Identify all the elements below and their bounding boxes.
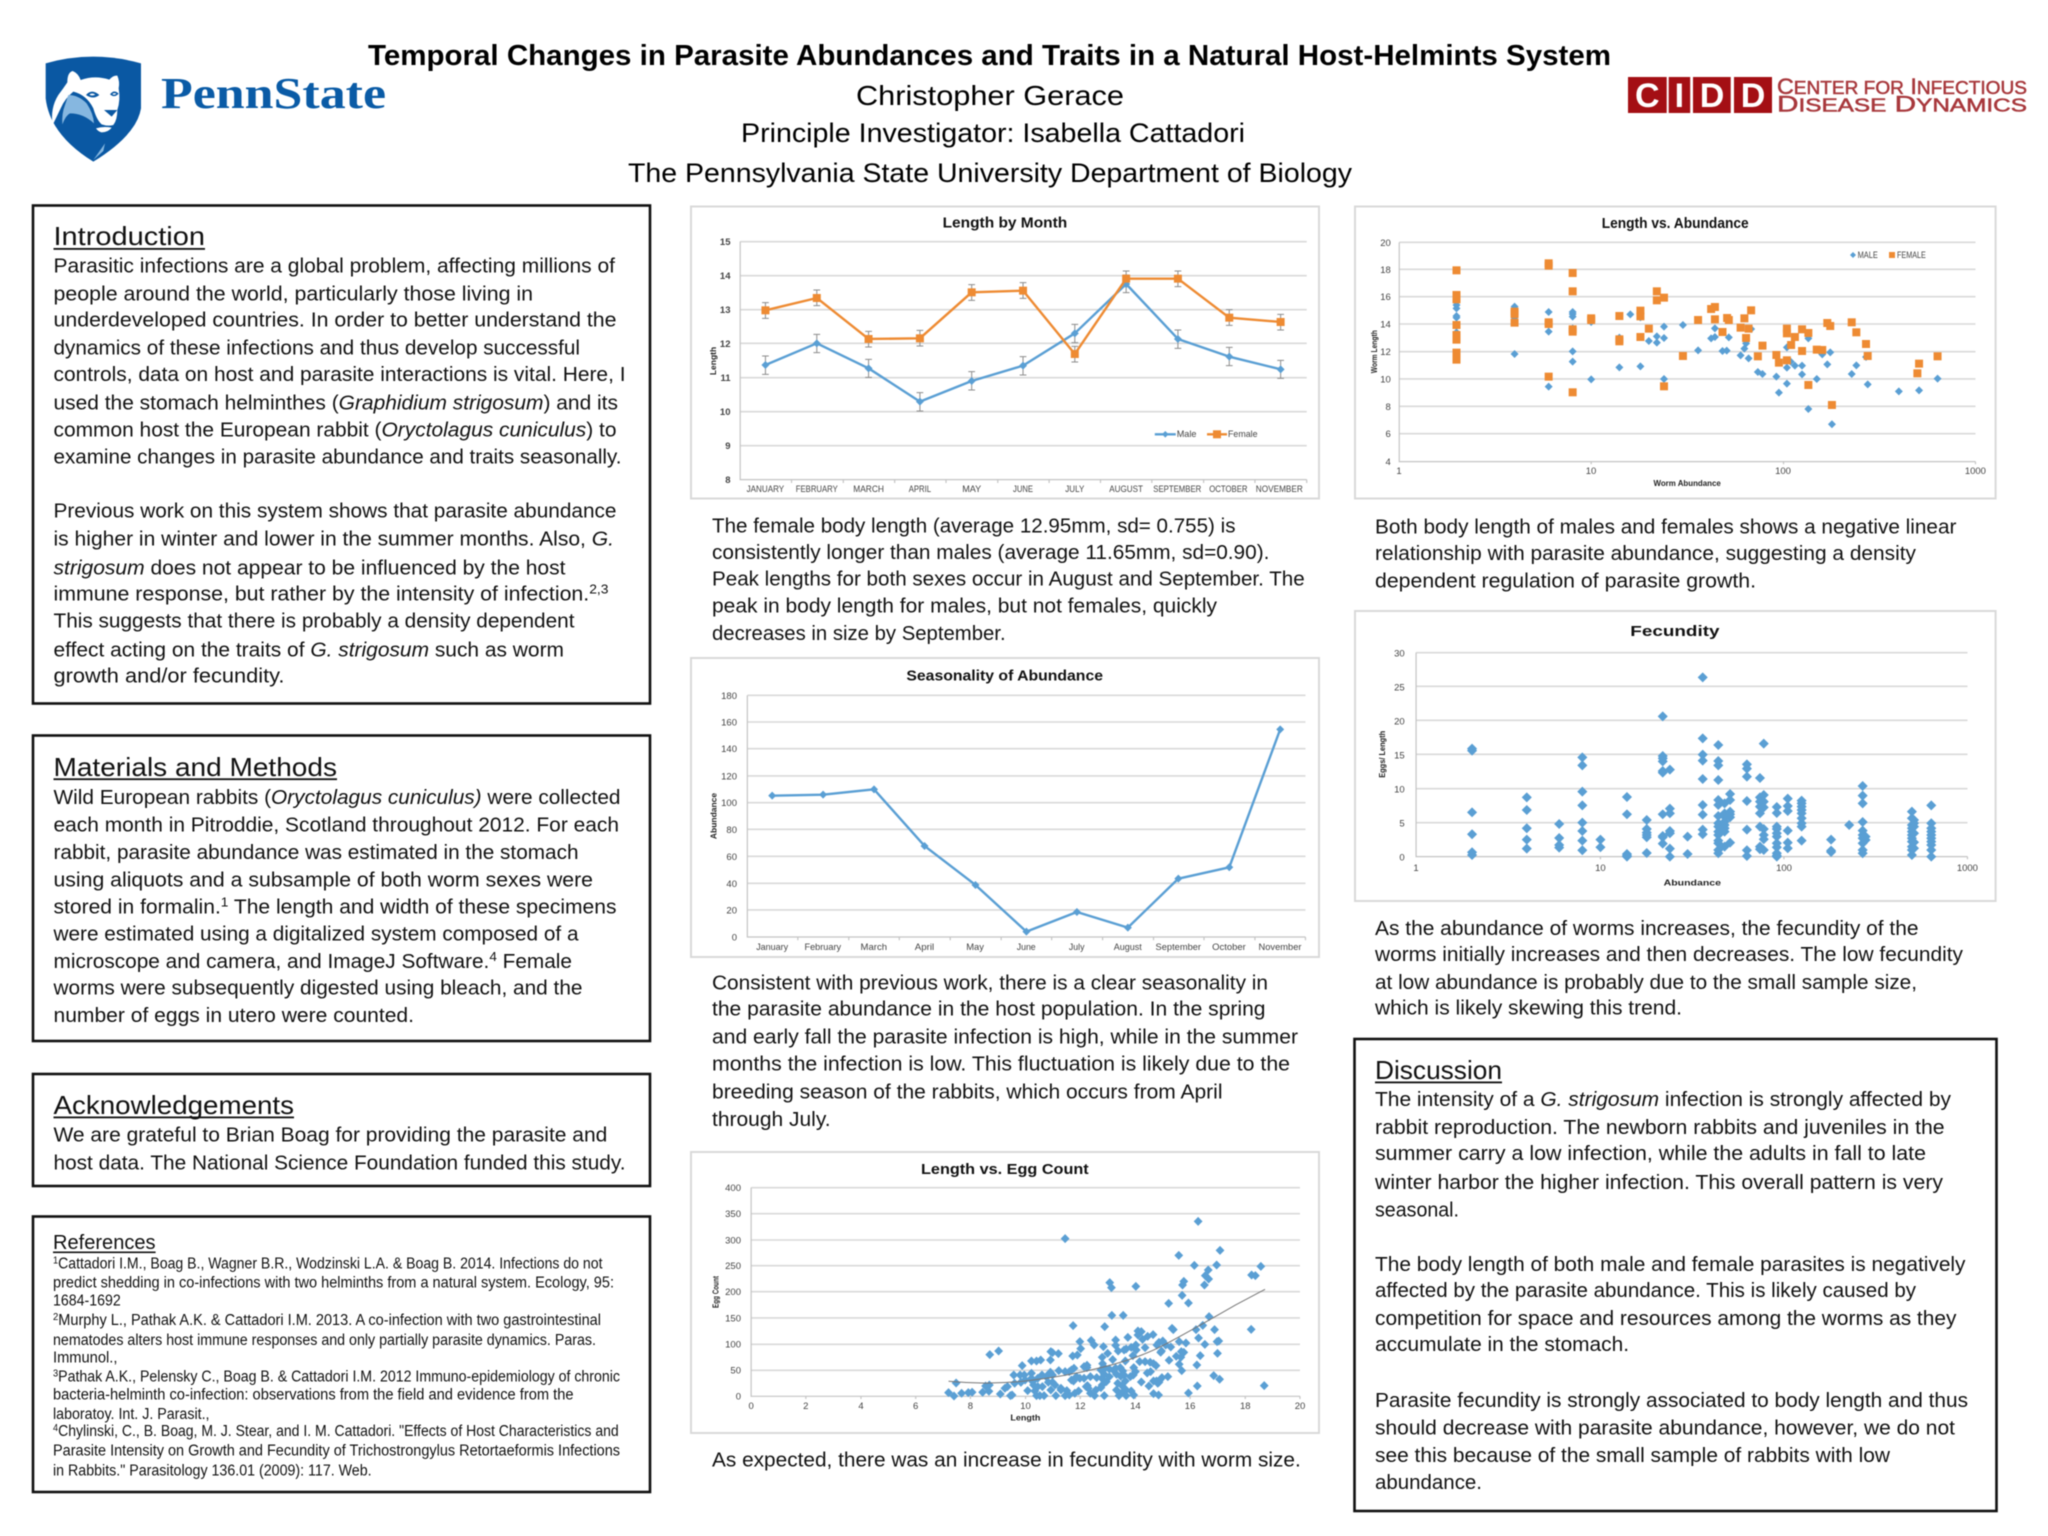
chart title: Length vs. Egg Count: [921, 1162, 1089, 1178]
text: introduction body: 2,3: [589, 581, 608, 596]
x axis labels: AUGUST: [1109, 484, 1143, 495]
heading: references: References: [53, 1231, 156, 1254]
text: methods body: microscope and camera, and ImageJ Software.: [54, 951, 473, 973]
x axis labels: 0: [748, 1401, 754, 1412]
y axis labels: 300: [725, 1236, 741, 1246]
caption: length vs abundance: relationship with parasite abundance, suggesting a density: [1375, 543, 1916, 565]
caption: length by month: consistently longer than males (average 11.65mm, sd=0.90).: [712, 542, 1269, 564]
heading: introduction: Introduction: [54, 221, 205, 251]
text: introduction body: examine changes in parasite abundance and traits seasonally.: [54, 446, 622, 468]
x axis labels: February: [804, 942, 841, 953]
CIDD tiles: I: [1675, 77, 1684, 115]
panel: materials and methods: [33, 736, 650, 1041]
y axis labels: 160: [721, 718, 737, 728]
text: discussion body: abundance.: [1375, 1472, 1482, 1494]
y axis labels: 8: [1386, 402, 1391, 413]
x axis labels: 12: [1075, 1401, 1086, 1412]
x axis labels: October: [1212, 942, 1246, 953]
text: reference list: laboratoy. Int. J. Parasit.,: [53, 1406, 210, 1423]
CIDD tiles: C: [1635, 77, 1660, 115]
y axis title: Egg Count: [710, 1276, 720, 1308]
x axis labels: August: [1114, 942, 1142, 953]
caption: length by month: decreases in size by September.: [712, 623, 1006, 645]
y axis title: Length: [708, 347, 718, 375]
y axis labels: 14: [1380, 320, 1391, 330]
CIDD tiles: D: [1700, 77, 1724, 115]
text: discussion body: summer carry a low infection, while the adults in fall to late: [1375, 1143, 1926, 1165]
y axis labels: 10: [1380, 374, 1391, 386]
legend: Male: [1177, 429, 1196, 440]
panel: references: [33, 1216, 650, 1492]
chart: seasonality of abundance: [691, 658, 1319, 957]
x axis labels: July: [1069, 942, 1085, 953]
investigator: Principle Investigator: Isabella Cattadori: [741, 118, 1245, 148]
legend: [1155, 429, 1258, 440]
text: reference list: Chylinski, C., B. Boag, M. J. Stear, and I. M. Cattadori. "Effects of Host Characteristics and: [58, 1423, 619, 1440]
caption: seasonality: [712, 972, 1298, 1131]
CIDD tiles: D: [1741, 77, 1765, 115]
text: methods body: Wild European rabbits ( Oryctolagus cuniculus) were collected: [54, 787, 620, 809]
x axis labels: 18: [1240, 1401, 1251, 1412]
x axis labels: MAY: [962, 484, 982, 495]
axes y labels: 12: [720, 339, 730, 350]
y axis labels: 150: [725, 1314, 741, 1324]
text: reference list: in Rabbits." Parasitology 136.01 (2009): 117. Web.: [53, 1463, 372, 1480]
x axis labels: APRIL: [909, 484, 931, 495]
axes y labels: 11: [720, 373, 731, 384]
text: reference list: predict shedding in co-infections with two helminths from a natural system. Ecology, 95:: [53, 1275, 614, 1292]
text: introduction body: controls, data on host and parasite interactions is vital. Here, I: [54, 364, 626, 386]
y axis labels: 18: [1380, 265, 1391, 276]
y axis labels: [1394, 649, 1405, 864]
y axis labels: 10: [1394, 785, 1405, 796]
text: discussion body: accumulate in the stomach.: [1375, 1334, 1629, 1356]
logo: CIDD: [1628, 74, 2027, 116]
plot: fecundity scatter: [1416, 653, 1967, 859]
x axis labels: [748, 1401, 1305, 1412]
y axis labels: 0: [1399, 853, 1405, 864]
text: acknowledgements body: host data. The National Science Foundation funded this study.: [54, 1152, 626, 1174]
caption: seasonality: the parasite abundance in the host population. In the spring: [712, 998, 1266, 1020]
x axis labels: 10: [1020, 1401, 1031, 1412]
CIDD name: CENTER FOR INFECTIOUS: [1777, 74, 2027, 99]
chart title: Fecundity: [1630, 624, 1720, 640]
x axis labels: [756, 942, 1302, 953]
plot: male and female lines with error bars: [740, 242, 1307, 483]
text: discussion body: seasonal.: [1375, 1199, 1459, 1221]
text: discussion body: winter harbor the higher infection. This overall pattern is very: [1374, 1172, 1943, 1194]
text: reference list: 2: [53, 1312, 59, 1323]
axes y labels: 13: [720, 305, 730, 316]
x axis labels: 100: [1776, 863, 1792, 874]
x axis labels: 16: [1185, 1401, 1195, 1412]
CIDD tiles: [1628, 77, 1772, 115]
panel: introduction: [33, 206, 650, 704]
heading: discussion: Discussion: [1375, 1055, 1502, 1085]
text: discussion body: rabbit reproduction. The newborn rabbits and juveniles in the: [1375, 1117, 1945, 1139]
y axis title: Abundance: [708, 793, 718, 839]
y axis labels: 80: [726, 825, 737, 836]
text: reference list: 1684-1692: [53, 1293, 121, 1310]
chart title: Length by Month: [943, 216, 1067, 232]
text: reference list: bacteria-helminth co-infection: observations from the field and evidence from the: [53, 1386, 574, 1403]
x axis title: Length: [1010, 1413, 1040, 1423]
legend: Female: [1228, 429, 1258, 440]
x axis labels: FEBRUARY: [796, 484, 838, 495]
text: introduction body: strigosum does not appear to be influenced by the host: [54, 557, 566, 579]
x axis labels: 10: [1586, 466, 1596, 477]
caption: fecundity: As the abundance of worms increases, the fecundity of the: [1375, 918, 1918, 940]
text: reference list: Immunol.,: [53, 1350, 117, 1367]
x axis labels: 1000: [1965, 466, 1986, 477]
x axis labels: 10: [1595, 863, 1606, 874]
y axis labels: 15: [1394, 750, 1405, 761]
x axis labels: 1: [1413, 863, 1419, 874]
text: introduction body: growth and/or fecundity.: [54, 665, 284, 687]
legend: MALE: [1858, 250, 1878, 261]
text: reference list: 4: [53, 1423, 58, 1434]
caption: length by month: [712, 516, 1305, 645]
y axis labels: 20: [1380, 238, 1391, 249]
y axis labels: 12: [1380, 347, 1391, 358]
text: introduction body: [54, 255, 626, 687]
caption: seasonality: and early fall the parasite infection is high, while in the summer: [712, 1026, 1298, 1048]
caption: length by month: The female body length (average 12.95mm, sd= 0.755) is: [712, 516, 1236, 538]
x axis labels: [747, 484, 1303, 495]
caption: fecundity: [1374, 918, 1963, 1020]
text: methods body: number of eggs in utero were counted.: [54, 1005, 414, 1027]
text: reference list: 3: [53, 1369, 59, 1380]
text: methods body: using aliquots and a subsample of both worm sexes were: [54, 869, 593, 891]
text: introduction body: immune response, but rather by the intensity of infection.: [54, 583, 556, 605]
y axis labels: 60: [726, 852, 737, 863]
text: methods body: Female: [497, 951, 572, 973]
x axis labels: 100: [1775, 466, 1791, 477]
CIDD name: D ISEASE D YNAMICS: [1777, 92, 2027, 116]
text: introduction body: underdeveloped countries. In order to better understand the: [54, 309, 616, 331]
caption: seasonality: months the infection is low. This fluctuation is likely due to the: [712, 1053, 1290, 1075]
caption: fecundity: at low abundance is probably due to the small sample size,: [1375, 972, 1917, 994]
caption: seasonality: Consistent with previous work, there is a clear seasonality in: [712, 972, 1268, 994]
x axis labels: 1: [1396, 466, 1402, 477]
x axis labels: March: [861, 942, 887, 953]
panel: discussion: [1354, 1039, 1996, 1511]
y axis labels: 20: [1394, 716, 1405, 727]
text: acknowledgements body: We are grateful to Brian Boag for providing the parasite and: [54, 1124, 607, 1146]
y axis labels: 180: [721, 691, 737, 702]
x axis labels: JUNE: [1013, 484, 1033, 495]
chart: fecundity: [1355, 611, 1996, 901]
y axis labels: 6: [1386, 429, 1391, 440]
text: methods body: 4: [489, 949, 497, 964]
x axis labels: SEPTEMBER: [1153, 484, 1201, 495]
y axis labels: [721, 691, 737, 944]
y axis labels: 400: [725, 1183, 741, 1194]
text: introduction body: Previous work on this system shows that parasite abundance: [54, 500, 616, 522]
caption: length by month: Peak lengths for both sexes occur in August and September. The: [712, 569, 1305, 591]
text: methods body: rabbit, parasite abundance was estimated in the stomach: [54, 842, 578, 864]
wordmark: PennState: [161, 69, 386, 118]
chart title: Length vs. Abundance: [1602, 216, 1749, 232]
plot: male and female scatter: [1399, 242, 1975, 464]
legend: [1850, 250, 1926, 261]
text: discussion body: [1374, 1089, 1968, 1494]
y axis labels: 25: [1394, 682, 1405, 693]
chart title: Seasonality of Abundance: [906, 669, 1103, 685]
text: reference list: Murphy L., Pathak A.K. & Cattadori I.M. 2013. A co-infection with two gastrointestinal: [58, 1312, 601, 1329]
plot: abundance line: [747, 695, 1305, 940]
text: reference list: nematodes alters host immune responses and only partially parasite dynamics. Paras.: [53, 1332, 596, 1349]
caption: fecundity: which is likely skewing this trend.: [1374, 998, 1682, 1020]
x axis labels: 6: [913, 1401, 918, 1412]
text: reference list: Parasite Intensity on Growth and Fecundity of Trichostrongylus Retortaeformis Infections: [53, 1443, 620, 1460]
icon: nittany lion shield: [46, 57, 141, 162]
x axis labels: 2: [803, 1401, 808, 1412]
x axis labels: 20: [1295, 1401, 1305, 1412]
y axis title: Worm Length: [1369, 330, 1379, 373]
text: methods body: The length and width of these specimens: [228, 896, 616, 918]
text: methods body: 1: [221, 894, 228, 909]
y axis labels: 40: [726, 879, 737, 890]
text: methods body: were estimated using a digitalized system composed of a: [52, 923, 579, 945]
y axis labels: 100: [725, 1340, 741, 1350]
x axis labels: [1396, 466, 1986, 477]
x axis labels: JANUARY: [747, 484, 785, 495]
x axis labels: OCTOBER: [1209, 484, 1248, 495]
axes y labels: [720, 237, 731, 486]
heading: materials and methods: Materials and Methods: [54, 752, 337, 782]
x axis labels: 14: [1130, 1401, 1141, 1412]
axes y labels: 14: [720, 271, 731, 282]
text: introduction body: This suggests that there is probably a density dependent: [54, 610, 575, 632]
text: introduction body: effect acting on the traits of G. strigosum such as worm: [54, 639, 564, 661]
text: introduction body: is higher in winter and lower in the summer months. Also, G.: [54, 528, 614, 550]
text: reference list: Cattadori I.M., Boag B., Wagner B.R., Wodzinski L.A. & Boag B. 2014. Infections do not: [58, 1255, 603, 1272]
y axis labels: 100: [721, 798, 737, 809]
panel: acknowledgements: [33, 1074, 650, 1186]
text: acknowledgements body: [54, 1124, 626, 1174]
text: discussion body: affected by the parasite abundance. This is likely caused by: [1375, 1280, 1916, 1302]
heading: acknowledgements: Acknowledgements: [54, 1090, 294, 1120]
author: Christopher Gerace: [856, 80, 1124, 111]
axes y labels: 9: [725, 441, 730, 452]
chart: length vs abundance: [1355, 206, 1996, 498]
y axis labels: 0: [732, 932, 737, 944]
y axis labels: 120: [721, 772, 737, 782]
x axis labels: 1000: [1957, 863, 1978, 874]
y axis labels: 16: [1380, 292, 1391, 303]
axes y labels: 10: [720, 407, 730, 418]
plot: egg count scatter with trend curve: [751, 1188, 1300, 1399]
x axis labels: November: [1258, 942, 1302, 953]
caption: seasonality: breeding season of the rabbits, which occurs from April: [712, 1081, 1222, 1103]
axes y labels: 8: [725, 475, 730, 486]
caption: egg count: As expected, there was an increase in fecundity with worm size.: [712, 1450, 1301, 1472]
text: methods body: worms were subsequently digested using bleach, and the: [52, 978, 582, 1000]
y axis labels: 350: [725, 1209, 741, 1220]
x axis labels: [1413, 863, 1978, 874]
logo: Penn State: [46, 57, 386, 162]
y axis labels: 140: [721, 744, 737, 755]
text: methods body: [52, 787, 620, 1027]
text: discussion body: should decrease with parasite abundance, however, we do not: [1375, 1418, 1955, 1440]
text: discussion body: Parasite fecundity is strongly associated to body length and thus: [1375, 1390, 1968, 1412]
text: introduction body: people around the world, particularly those living in: [54, 283, 533, 305]
x axis labels: JULY: [1065, 484, 1085, 495]
x axis title: Worm Abundance: [1654, 478, 1721, 488]
text: reference list: 1: [53, 1255, 59, 1266]
y axis labels: 20: [726, 906, 737, 916]
title: Temporal Changes in Parasite Abundances and Traits in a Natural Host-Helmints System: [368, 40, 1611, 72]
chart: length by month: [691, 206, 1319, 498]
y axis labels: 50: [730, 1366, 741, 1376]
x axis title: Abundance: [1664, 878, 1721, 888]
CIDD name: [1777, 74, 2027, 116]
department: The Pennsylvania State University Department of Biology: [628, 158, 1353, 188]
text: introduction body: common host the European rabbit ( Oryctolagus cuniculus ) to: [54, 419, 616, 441]
x axis labels: June: [1017, 942, 1036, 953]
caption: length vs abundance: Both body length of males and females shows a negative linear: [1375, 516, 1957, 538]
caption: length vs abundance: [1375, 516, 1957, 592]
y axis labels: 30: [1394, 649, 1405, 660]
title block: [368, 40, 1611, 188]
y axis labels: 200: [725, 1287, 741, 1298]
y axis labels: 250: [725, 1261, 741, 1272]
x axis labels: May: [966, 942, 984, 953]
text: discussion body: see this because of the small sample of rabbits with low: [1375, 1445, 1891, 1467]
y axis title: Eggs/ Length: [1377, 731, 1387, 778]
caption: fecundity: worms initially increases and then decreases. The low fecundity: [1374, 944, 1963, 966]
y axis labels: 4: [1386, 457, 1391, 468]
caption: length by month: peak in body length for males, but not females, quickly: [712, 595, 1217, 617]
x axis labels: April: [915, 942, 934, 953]
text: methods body: stored in formalin.: [54, 896, 212, 918]
axes y labels: 15: [720, 237, 731, 248]
text: discussion body: competition for space and resources among the worms as they: [1375, 1308, 1956, 1330]
text: introduction body: used the stomach helminthes ( Graphidium strigosum ) and its: [54, 392, 618, 414]
y axis labels: 5: [1399, 819, 1405, 830]
legend: FEMALE: [1897, 250, 1926, 261]
text: discussion body: The intensity of a G. strigosum infection is strongly affected by: [1375, 1089, 1951, 1111]
x axis labels: September: [1156, 942, 1201, 953]
text: introduction body: Parasitic infections are a global problem, affecting millions of: [54, 255, 615, 277]
y axis labels: 0: [736, 1392, 741, 1402]
x axis labels: January: [756, 942, 788, 953]
text: reference list: Pathak A.K., Pelensky C., Boag B. & Cattadori I.M. 2012 Immuno-epidemiology of chronic: [58, 1369, 620, 1386]
text: introduction body: dynamics of these infections and thus develop successful: [54, 337, 580, 359]
y axis labels: [725, 1183, 741, 1402]
x axis labels: 4: [858, 1401, 864, 1412]
x axis labels: 8: [968, 1401, 973, 1412]
caption: length vs abundance: dependent regulation of parasite growth.: [1375, 570, 1756, 592]
y axis labels: [1380, 238, 1391, 468]
x axis labels: NOVEMBER: [1256, 484, 1303, 495]
text: reference list: [53, 1255, 620, 1480]
text: methods body: each month in Pitroddie, Scotland throughout 2012. For each: [54, 814, 619, 836]
caption: seasonality: through July.: [712, 1109, 831, 1131]
chart: length vs egg count: [691, 1152, 1319, 1433]
x axis labels: MARCH: [853, 484, 884, 495]
text: discussion body: The body length of both male and female parasites is negatively: [1375, 1254, 1966, 1276]
